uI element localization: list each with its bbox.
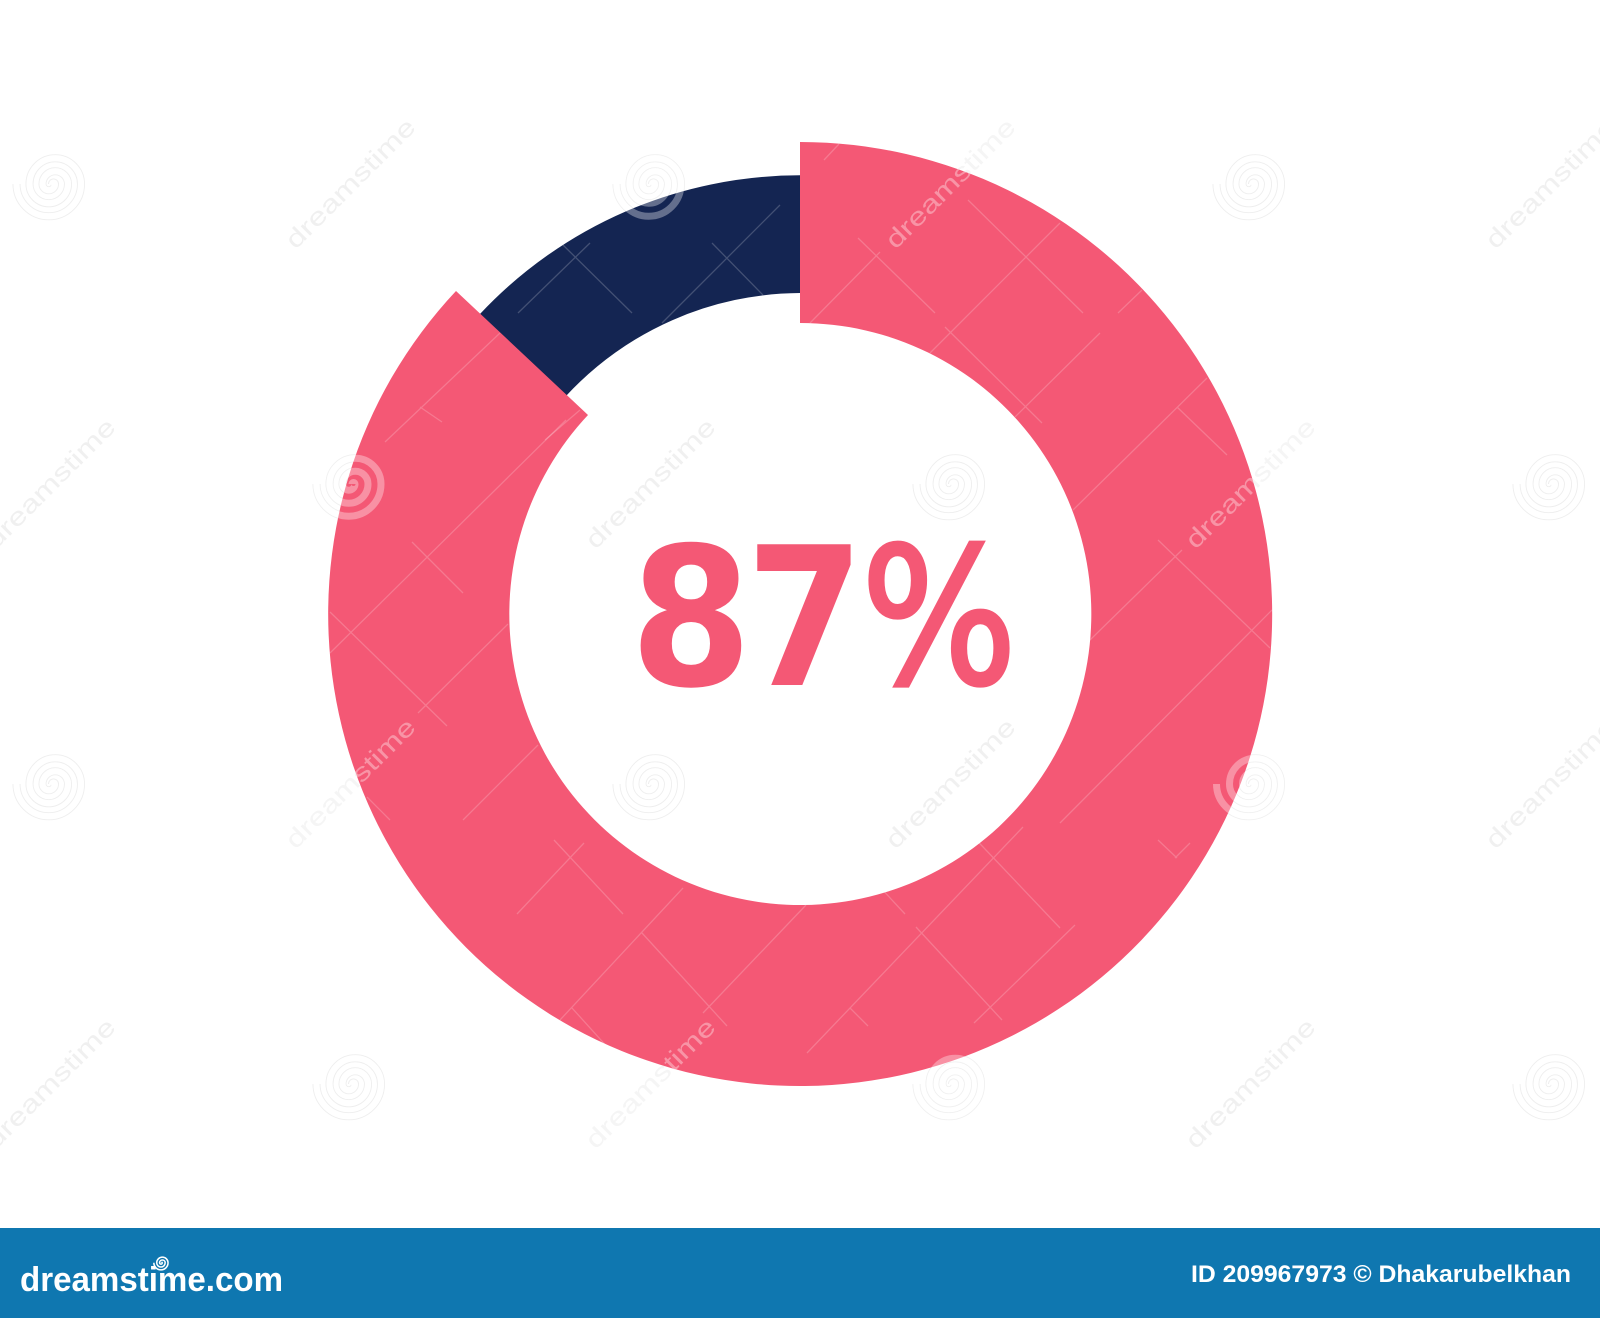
watermark text over chart: dreamstime [280,713,421,854]
watermark text on white: dreamstime [1480,113,1600,254]
icon: logo spiral [154,1257,168,1270]
center percentage label [630,506,1017,731]
watermark text on white: dreamstime [280,713,421,854]
watermark text on white: dreamstime [580,1013,721,1154]
center percentage label: 8 [630,506,752,731]
watermark lines over chart [330,144,1272,1053]
watermark spirals on white [16,158,1581,1116]
watermark text on white: dreamstime [280,113,421,254]
watermark text over chart: dreamstime [1180,413,1321,554]
bottom footer bar [0,1228,1600,1318]
watermark text on white: dreamstime [1480,713,1600,854]
watermark text over chart [280,113,1321,1154]
watermark spirals over chart [316,158,1281,1116]
watermark text on white: dreamstime [880,713,1021,854]
watermark text on white: dreamstime [580,413,721,554]
87% segment (pink) [328,142,1272,1086]
watermark text on white: dreamstime [880,113,1021,254]
center percentage label: 7 [746,506,864,731]
remaining 13% segment (navy) [480,175,800,396]
image id and author credit: ID 209967973 © Dhakarubelkhan [1191,1261,1571,1288]
watermark text over chart: dreamstime [880,113,1021,254]
watermark text over chart: dreamstime [580,1013,721,1154]
watermark text on white: dreamstime [1180,413,1321,554]
footer logo wordmark: dreamstime.com [20,1261,283,1299]
donut chart [328,142,1272,1086]
center percentage label: % [861,508,1017,728]
watermark text on white [0,113,1600,1154]
watermark text on white: dreamstime [1180,1013,1321,1154]
